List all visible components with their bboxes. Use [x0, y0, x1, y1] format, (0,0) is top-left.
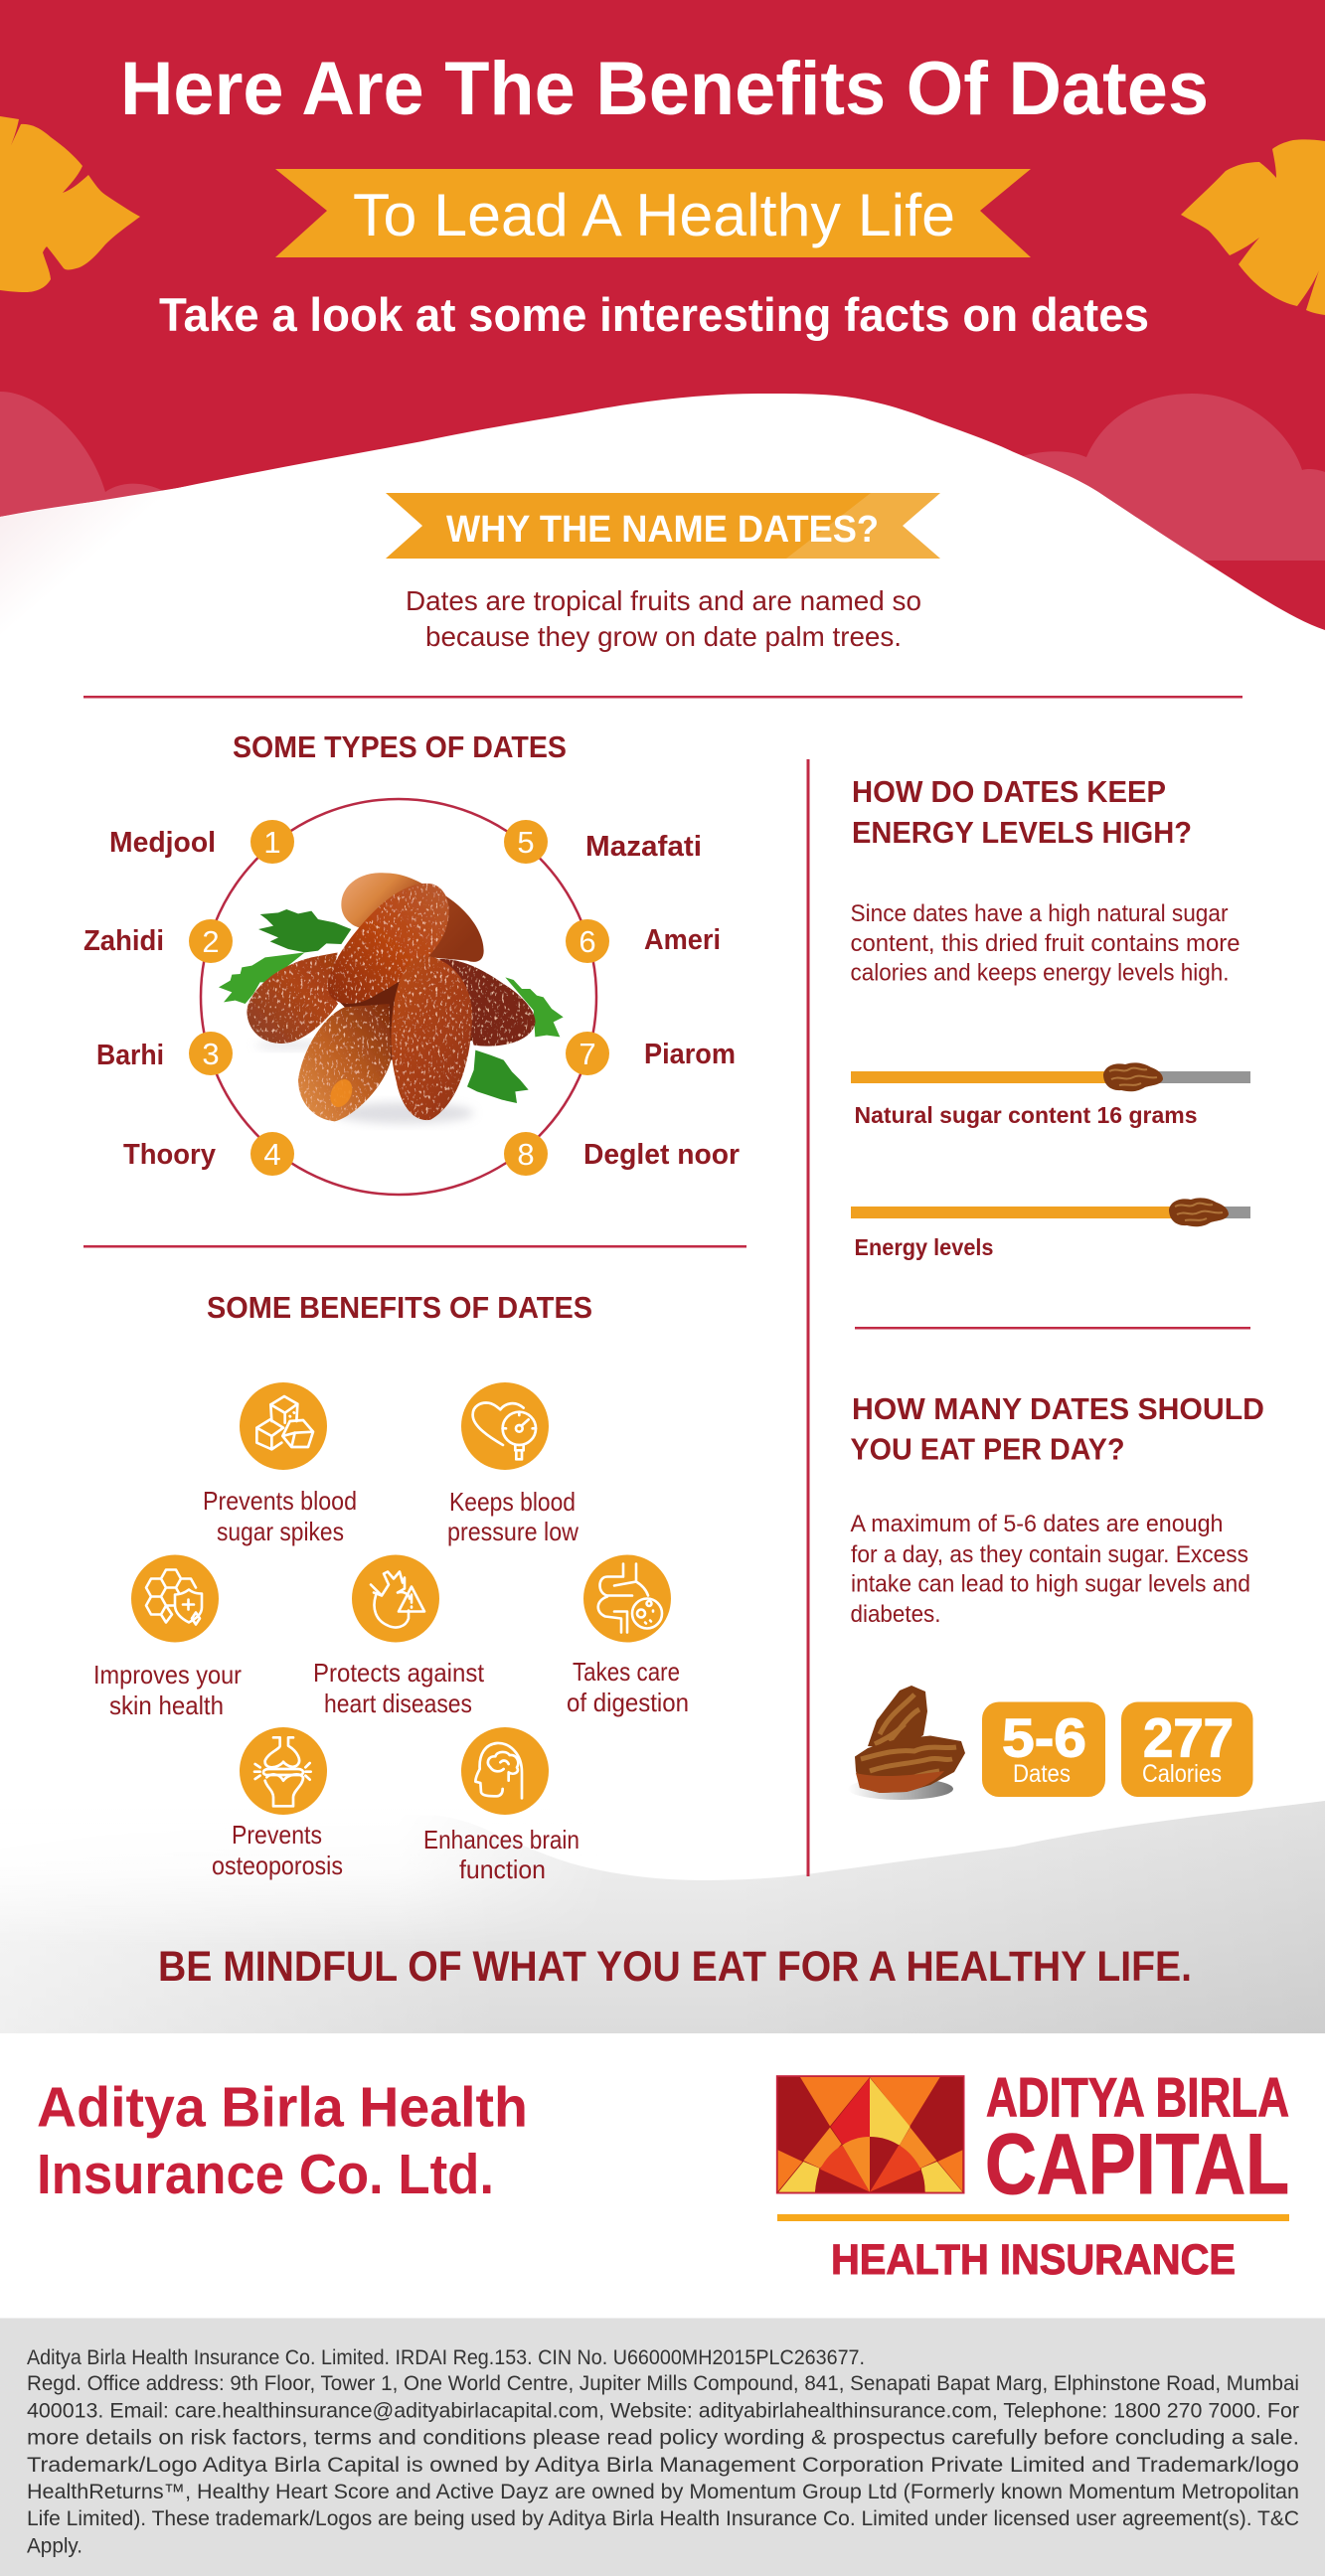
banner: why the name dates — [386, 493, 940, 559]
text: why the name explanation — [406, 585, 921, 652]
text: energy explanation — [851, 900, 1241, 986]
text: why the name explanation: because they grow on date palm trees. — [425, 621, 902, 652]
company name: Aditya Birla Health — [37, 2075, 528, 2139]
dark gap between dates — [338, 964, 474, 1060]
icon: sugar cubes — [256, 1396, 313, 1449]
text: how many explanation: diabetes. — [851, 1601, 940, 1628]
panel: legal footer: Regd. Office address: 9th Floor, Tower 1, One World Centre, Jupiter Mills Compound, 841, Senapati Bapat Marg, Elphinstone Road, Mumbai — [27, 2372, 1299, 2395]
date type labels: Piarom — [644, 1039, 736, 1070]
number badges — [189, 820, 609, 1176]
leaf upper left — [258, 909, 351, 952]
benefit: improves your skin health: skin health — [109, 1690, 224, 1720]
stat box: 277 calories — [1121, 1701, 1252, 1797]
benefit: keeps blood pressure low: pressure low — [447, 1517, 579, 1546]
icon: left monstera leaf — [0, 116, 140, 292]
date left — [247, 952, 338, 1044]
number badges: 3 — [202, 1037, 220, 1071]
title: Here Are The Benefits Of Dates — [120, 47, 1209, 131]
logo: aditya birla capital — [777, 2065, 1289, 2284]
text: how many explanation: A maximum of 5-6 dates are enough — [851, 1511, 1223, 1537]
stat box: 277 calories: Calories — [1142, 1760, 1222, 1788]
benefit: improves your skin health — [93, 1554, 242, 1720]
panel: legal footer: Apply. — [27, 2534, 83, 2558]
date type labels: Zahidi — [83, 925, 164, 957]
panel: red header background — [0, 0, 1325, 646]
heading: benefits of dates: SOME BENEFITS OF DATES — [207, 1290, 592, 1325]
date type labels: Ameri — [644, 924, 721, 956]
heading: energy levels: ENERGY LEVELS HIGH? — [852, 815, 1192, 850]
date type labels: Barhi — [96, 1040, 164, 1071]
number badges: 5 — [517, 825, 535, 860]
text: how many explanation: intake can lead to high sugar levels and — [851, 1570, 1250, 1598]
photo illustration: dates and leaves — [219, 873, 564, 1124]
panel: legal footer: HealthReturns™, Healthy Heart Score and Active Dayz are owned by Momentum Group Ltd (Formerly known Momentum Metropolitan — [27, 2481, 1299, 2503]
icon: intestine — [598, 1564, 662, 1632]
text: energy explanation: Since dates have a high natural sugar — [851, 900, 1229, 927]
number badges: 1 — [263, 825, 281, 860]
benefit: keeps blood pressure low: Keeps blood — [449, 1487, 576, 1517]
benefit: protects against heart diseases: Protects against — [313, 1658, 485, 1688]
heading: how many dates: YOU EAT PER DAY? — [851, 1431, 1125, 1467]
number badges: 8 — [517, 1137, 535, 1172]
leaf right — [505, 977, 564, 1037]
stat box: 5-6 dates: 5-6 — [1002, 1707, 1086, 1769]
panel: legal footer: Life Limited). These trademark/Logos are being used by Aditya Birla Health Insurance Co. Limited under licensed user agreement(s). T&C — [27, 2507, 1299, 2530]
stat box: 5-6 dates — [982, 1701, 1105, 1797]
text: energy explanation: calories and keeps energy levels high. — [851, 960, 1229, 986]
heading: energy levels: HOW DO DATES KEEP — [852, 774, 1166, 809]
benefit: enhances brain function: function — [459, 1854, 546, 1884]
text: how many explanation — [851, 1511, 1250, 1628]
logo mark — [777, 2076, 964, 2193]
icon: knee joint — [254, 1737, 311, 1806]
panel: legal footer: Trademark/Logo Aditya Birla Capital is owned by Aditya Birla Management Corporation Private Limited and Trademark/logo — [27, 2454, 1299, 2477]
text: energy explanation: content, this dried fruit contains more — [851, 930, 1241, 957]
number badges: 6 — [579, 924, 596, 959]
benefit: takes care of digestion — [567, 1554, 689, 1717]
number badges: 2 — [202, 924, 220, 959]
company name: Insurance Co. Ltd. — [37, 2143, 494, 2206]
text: how many explanation: for a day, as they contain sugar. Excess — [851, 1541, 1248, 1568]
heading: how many dates: HOW MANY DATES SHOULD — [852, 1391, 1264, 1426]
heading: energy levels — [852, 774, 1192, 850]
decorative pink cloud left — [0, 392, 178, 527]
panel: legal footer: 400013. Email: care.healthinsurance@adityabirlacapital.com, Website: adityabirlahealthinsurance.com, Telephone: 1800 270 7000. For — [27, 2399, 1299, 2423]
benefit: enhances brain function — [423, 1727, 580, 1884]
icon: right monstera leaf — [1181, 139, 1325, 315]
stat box: 277 calories: 277 — [1143, 1707, 1234, 1769]
panel: legal footer: more details on risk factors, terms and conditions please read policy wording & prospectus carefully before concluding a sale. — [27, 2427, 1299, 2449]
benefit: prevents osteoporosis — [212, 1727, 343, 1880]
date centre front — [391, 956, 472, 1120]
date lower left — [298, 1004, 391, 1121]
benefit: protects against heart diseases — [313, 1554, 485, 1718]
benefit: prevents blood sugar spikes: sugar spikes — [217, 1517, 344, 1546]
date right — [437, 959, 535, 1046]
decorative pink cloud right — [1014, 394, 1325, 561]
banner: to lead a healthy life: To Lead A Healthy Life — [353, 182, 955, 248]
panel: types of dates wheel — [83, 799, 740, 1195]
benefit: prevents blood sugar spikes: Prevents blood — [203, 1486, 357, 1516]
heading: how many dates — [851, 1391, 1264, 1467]
text: why the name explanation: Dates are tropical fruits and are named so — [406, 585, 921, 616]
number badges: 4 — [263, 1137, 281, 1172]
benefit: takes care of digestion: of digestion — [567, 1688, 689, 1717]
benefit: takes care of digestion: Takes care — [573, 1657, 680, 1687]
closing message: BE MINDFUL OF WHAT YOU EAT FOR A HEALTHY LIFE. — [158, 1943, 1192, 1991]
benefit: keeps blood pressure low — [447, 1382, 579, 1546]
benefit: prevents osteoporosis: osteoporosis — [212, 1851, 343, 1880]
leaf lower left — [219, 952, 305, 1004]
date centre top — [328, 884, 449, 1004]
subtitle: Take a look at some interesting facts on dates — [159, 288, 1149, 341]
icon: skin honeycomb with shield — [146, 1570, 202, 1624]
bar: natural sugar content — [851, 1062, 1250, 1128]
benefit: prevents blood sugar spikes — [203, 1382, 357, 1546]
panel: legal footer — [0, 2318, 1325, 2576]
heading: types of dates: SOME TYPES OF DATES — [233, 729, 567, 764]
date type labels: Mazafati — [585, 831, 702, 863]
date type labels: Medjool — [109, 827, 216, 859]
date type labels: Thoory — [123, 1139, 216, 1171]
benefit: protects against heart diseases: heart diseases — [324, 1689, 472, 1718]
leaf bottom right — [467, 1050, 529, 1103]
benefit: prevents osteoporosis: Prevents — [232, 1820, 322, 1850]
panel: grey bottom wave — [0, 1799, 1325, 2033]
bar: energy levels: Energy levels — [855, 1234, 994, 1260]
panel: legal footer: Aditya Birla Health Insurance Co. Limited. IRDAI Reg.153. CIN No. U66000MH2015PLC263677. — [27, 2346, 865, 2369]
date back top — [341, 873, 484, 962]
banner: why the name dates: WHY THE NAME DATES? — [446, 509, 879, 551]
banner: to lead a healthy life — [275, 169, 1031, 257]
icon: heart with warning triangle — [371, 1572, 424, 1627]
bar: energy levels — [851, 1198, 1250, 1260]
date type labels — [83, 827, 740, 1171]
icon: two dates illustration — [848, 1686, 965, 1800]
number badges: 7 — [579, 1037, 596, 1071]
icon: head with brain — [475, 1743, 522, 1798]
panel: white logo band — [0, 2033, 1325, 2319]
date type labels: Deglet noor — [583, 1139, 740, 1171]
bar: natural sugar content: Natural sugar content 16 grams — [855, 1102, 1197, 1128]
logo: aditya birla capital: HEALTH INSURANCE — [831, 2236, 1236, 2284]
stat box: 5-6 dates: Dates — [1013, 1760, 1071, 1788]
icon: heart with pressure gauge — [473, 1403, 536, 1459]
benefit: improves your skin health: Improves your — [93, 1660, 242, 1690]
benefit: enhances brain function: Enhances brain — [423, 1825, 580, 1854]
company name — [37, 2075, 528, 2206]
